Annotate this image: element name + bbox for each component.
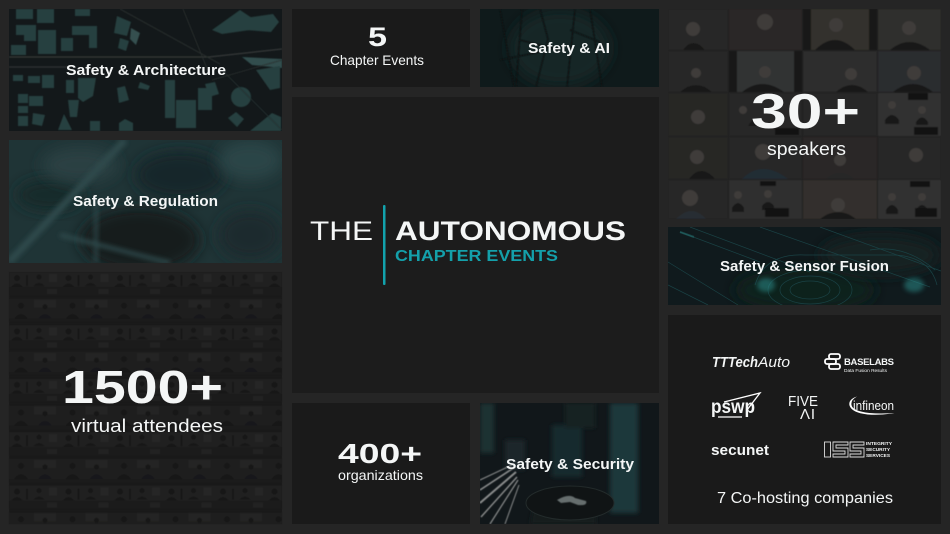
title word: THE: THE — [310, 216, 373, 246]
logo: BASELABS: BASELABS — [844, 357, 894, 368]
heading: Safety & Sensor Fusion: Safety & Sensor Fusion — [720, 259, 889, 275]
panel: centre title — [292, 97, 659, 393]
logo: ISS Integrity Security Services: INTEGRITY — [866, 441, 893, 447]
stat: 30+: 30+ — [751, 85, 860, 139]
label: speakers: speakers — [767, 139, 846, 159]
logo: TTTech Auto: TTTech — [712, 354, 758, 371]
stat: 400+: 400+ — [338, 438, 422, 469]
logo: pswp: pswp — [711, 397, 755, 418]
label: organizations: organizations — [338, 467, 423, 483]
logo: secunet: secunet — [711, 443, 769, 459]
panel: virtual attendees — [9, 272, 282, 524]
heading: Safety & Architecture: Safety & Architecture — [66, 63, 226, 79]
stat: 1500+: 1500+ — [62, 361, 223, 413]
subtitle: CHAPTER EVENTS: CHAPTER EVENTS — [395, 248, 558, 265]
logo: Infineon — [849, 396, 894, 415]
label: Chapter Events: Chapter Events — [330, 52, 424, 68]
panel: Safety & AI — [480, 9, 659, 87]
panel: Safety & Security — [480, 403, 659, 524]
logo: ISS Integrity Security Services: SECURITY — [866, 447, 891, 453]
label: 7 Co-hosting companies: 7 Co-hosting companies — [717, 490, 893, 507]
logo: TTTech Auto — [712, 354, 790, 371]
logo: BASELABS: Data Fusion Results — [844, 368, 888, 373]
label: virtual attendees: virtual attendees — [71, 416, 223, 436]
panel: 5 Chapter Events — [292, 9, 470, 87]
logo: FIVE AI — [788, 393, 818, 423]
logo: FIVE AI: FIVE — [788, 393, 818, 410]
panel: Safety & Architecture — [9, 9, 282, 131]
logo: ISS Integrity Security Services: SERVICES — [866, 453, 891, 459]
logo: BASELABS — [825, 354, 894, 373]
panel: Safety & Regulation — [9, 140, 282, 272]
heading: Safety & AI: Safety & AI — [528, 41, 610, 57]
panel: 400+ organizations — [292, 403, 470, 524]
heading: Safety & Regulation: Safety & Regulation — [73, 194, 218, 210]
panel: Safety & Sensor Fusion — [668, 227, 941, 312]
title: AUTONOMOUS: AUTONOMOUS — [395, 216, 626, 246]
logo: Infineon: infineon — [853, 399, 894, 413]
panel: speakers — [668, 9, 941, 219]
heading: Safety & Security: Safety & Security — [506, 457, 634, 473]
stat: 5: 5 — [368, 22, 387, 52]
panel: co-hosting companies — [668, 315, 941, 524]
divider bar — [383, 205, 386, 285]
logo: FIVE AI: ΛI — [800, 406, 815, 423]
logo: TTTech Auto: Auto — [757, 354, 790, 371]
logo: ISS Integrity Security Services — [824, 441, 893, 459]
